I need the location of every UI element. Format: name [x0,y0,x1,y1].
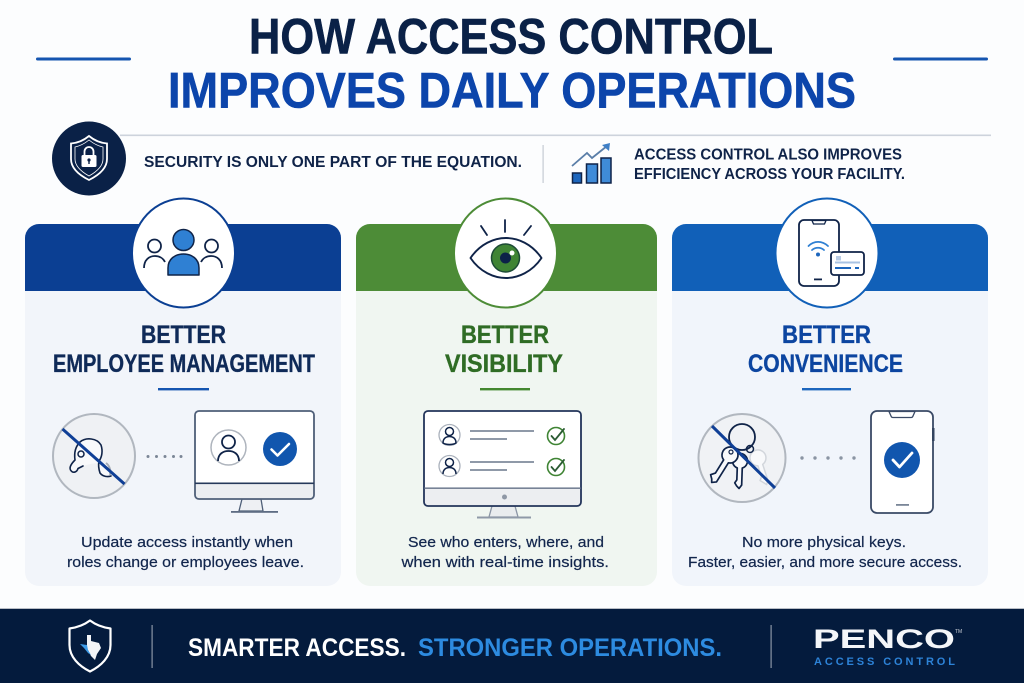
heading: CONVENIENCE [748,350,903,378]
description: roles change or employees leave. [67,555,304,571]
tagline: STRONGER OPERATIONS. [418,634,722,662]
logo: Penco Access Control: PENCO [813,624,955,654]
icon: monitor with access log [424,411,581,518]
text: efficiency statement [634,146,905,183]
heading [445,321,563,378]
panel: better visibility [356,198,657,586]
icon: crossed-out keys [698,414,786,502]
logo: Penco Access Control [813,624,962,668]
heading: VISIBILITY [445,350,563,378]
icon: phone and access card [799,220,864,286]
title [168,8,856,118]
dotted connector [800,456,856,460]
text: efficiency statement: ACCESS CONTROL ALSO IMPROVES [634,146,902,164]
heading: BETTER [782,321,871,349]
description: No more physical keys. [742,535,906,551]
icon: crossed-out key [53,414,135,498]
panel: better convenience [672,198,988,586]
description [400,535,609,571]
description [67,535,304,571]
icon: eye [470,220,542,278]
description: when with real-time insights. [400,555,609,571]
description: Faster, easier, and more secure access. [688,555,962,571]
logo: Penco Access Control: ACCESS CONTROL [814,656,955,668]
title: IMPROVES DAILY OPERATIONS [168,62,856,118]
description [688,535,962,571]
heading [53,321,315,378]
tagline [188,634,722,662]
heading: EMPLOYEE MANAGEMENT [53,350,315,378]
description: See who enters, where, and [408,535,604,551]
icon: people group [144,230,222,275]
footer band [0,608,1024,683]
icon: monitor with approved user [195,411,314,513]
logo: Penco Access Control: TM [955,629,962,635]
heading [748,321,903,378]
heading: BETTER [461,321,549,349]
panel: better employee management [25,198,341,586]
tagline: SMARTER ACCESS. [188,634,406,662]
text: security statement: SECURITY IS ONLY ONE PART OF THE EQUATION. [144,154,522,171]
icon: shield with Texas [70,620,110,672]
description: Update access instantly when [81,535,293,551]
dotted connector [146,455,182,458]
icon: phone with approval [871,411,934,513]
title: HOW ACCESS CONTROL [249,8,773,64]
text: efficiency statement: EFFICIENCY ACROSS YOUR FACILITY. [634,166,905,183]
icon: growth chart [572,143,611,183]
icon: shield with lock [52,122,126,196]
heading: BETTER [141,321,226,349]
